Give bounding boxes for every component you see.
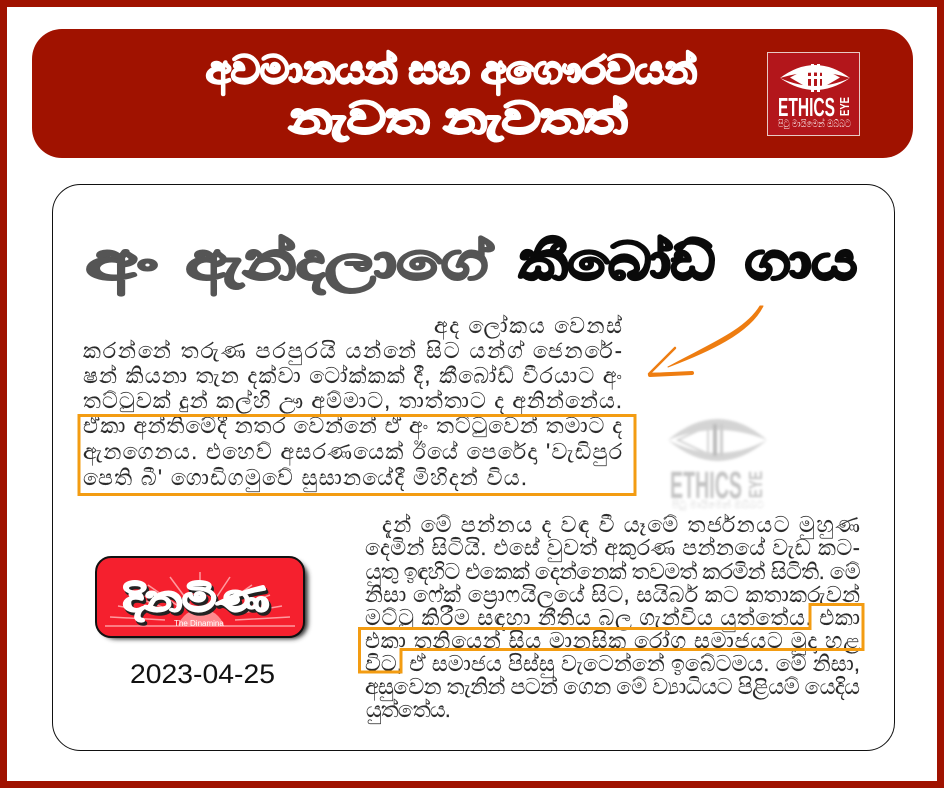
newspaper headline: කීබෝඩ් (519, 233, 715, 291)
article paragraph 1: පෙති බී' ගොඩිගමුවේ සුසානයේදී මිහිදන් විය. (83, 465, 527, 492)
Dinamina logo: දිනමිණ (125, 581, 271, 625)
Dinamina logo (96, 557, 308, 639)
arrow (649, 306, 763, 375)
faded watermark logo: ETHICS (670, 465, 742, 507)
faded watermark logo: පිටු මායිමෙන් ඔබ්බට (672, 498, 764, 511)
article paragraph 2: අසුවෙන තැනින් පටන් ගෙන මේ ව්‍යාධියට පිළියම් යෙදිය (365, 674, 860, 701)
highlight box 2 (360, 604, 863, 672)
article paragraph 2: එකා තනියෙන් සිය මානසික රෝග සමාජයට මුදා හළ (365, 628, 860, 655)
Ethics Eye logo (768, 52, 860, 136)
faded watermark logo: EYE (746, 471, 766, 498)
header banner (32, 29, 913, 158)
article paragraph 1: ඇනගෙනය. එහෙව් අසරණයෙක් ඊයේ පෙරේදා 'වැඩිපුර (83, 439, 623, 466)
Dinamina logo: දිනමිණ (123, 578, 269, 622)
newspaper headline (86, 233, 857, 296)
article paragraph 2: විට, ඒ සමාජය පිස්සු වැටෙන්නේ ඉබේටමය. මේ නිසා, (365, 651, 860, 678)
article paragraph 1: කරන්නේ තරුණ පරපුරයි යන්නේ සිට යන්ග් ජෙනරේ- (83, 338, 622, 365)
headline line 1: අවමානයන් සහ අගෞරවයන් (206, 49, 697, 95)
article paragraph 1: අද ලෝකය වෙනස් (434, 313, 622, 340)
newspaper headline: ඇන්දලාගේ (186, 233, 494, 296)
article paragraph 2: යුත්තේය. (366, 697, 451, 724)
Ethics Eye logo: EYE (837, 97, 852, 116)
article paragraph 1: ෂන් කියනා තැන දක්වා ටෝක්කක් දී, කීබෝඩ් වීරයාට අං (83, 363, 622, 390)
article paragraph 1: ඒකා අන්තිමේදී නතර වෙන්නේ ඒ අං තට්ටුවෙන් තමාට ද (83, 413, 622, 440)
faded watermark logo (668, 419, 767, 511)
article paragraph 2: දැන් මේ පන්නය ද වඳ වී යෑමේ තර්ජනයට මුහුණ (382, 512, 860, 539)
article paragraph 2: දෙමින් සිටියි. එසේ වුවත් අකුරණ පන්නයේ වැඩ කට- (365, 535, 860, 562)
newspaper headline: අං (86, 233, 158, 296)
highlight box 1 (79, 416, 635, 494)
article paragraph 2 (365, 512, 861, 724)
main panel (52, 184, 894, 750)
article paragraph 1: තට්ටුවක් දුන් කල්හි ඌ අම්මාට, තාත්තාට ද අනින්නේය. (83, 388, 622, 415)
article paragraph 2: මට්ටු කිරීම සඳහා නීතිය බල ගැන්විය යුත්තේය. එකා (365, 605, 860, 632)
date: 2023-04-25 (130, 659, 275, 689)
headline line 2: නැවත නැවතත් (289, 95, 627, 143)
Dinamina logo: The Dinamina (174, 619, 224, 628)
newspaper headline: ගාය (745, 233, 857, 291)
article paragraph 2: නිසා ෆේක් ප්‍රොෆයිලයේ සිට, සයිබර් කට කතාකරුවන් (365, 582, 860, 609)
article paragraph 2: යුතු ඉඳහිට එකෙක් දෙන්නෙක් තවමත් කරමින් සිටිති. මේ (366, 559, 861, 586)
article paragraph 1 (83, 313, 623, 492)
Ethics Eye logo: ETHICS (778, 92, 835, 122)
Ethics Eye logo: පිටු මායිමෙන් ඔබ්බට (778, 117, 851, 130)
